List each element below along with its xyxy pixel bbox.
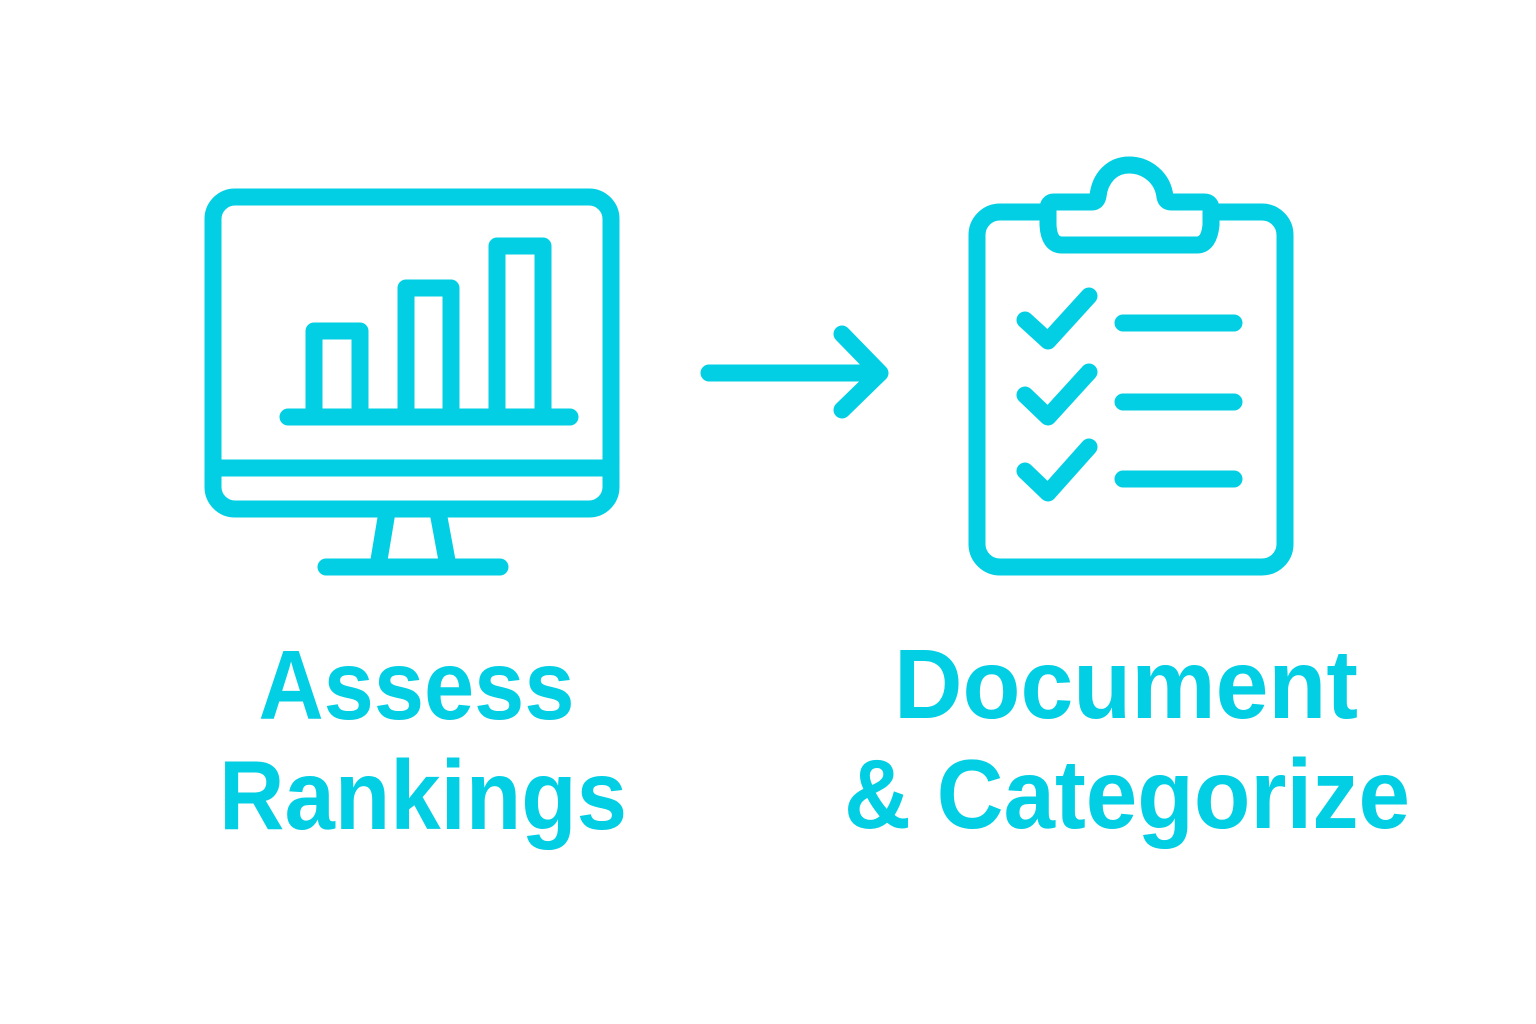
icon: computer monitor with bar chart	[213, 197, 611, 567]
bar chart	[288, 246, 570, 417]
label: Assess Rankings	[219, 630, 627, 850]
monitor stand	[326, 512, 500, 567]
label: Document & Categorize	[844, 629, 1410, 849]
checklist row 3	[1025, 447, 1234, 493]
monitor chin divider	[213, 460, 611, 476]
label: Assess Rankings: Assess	[258, 630, 574, 740]
icon: clipboard checklist	[977, 165, 1285, 567]
checklist row 1	[1025, 296, 1234, 341]
checklist row 2	[1025, 372, 1234, 417]
monitor frame	[213, 197, 611, 509]
label: Document & Categorize: & Categorize	[844, 739, 1410, 849]
label: Document & Categorize: Document	[894, 629, 1358, 739]
label: Assess Rankings: Rankings	[219, 740, 627, 850]
arrow	[709, 334, 880, 410]
clipboard clip	[1048, 165, 1211, 245]
clipboard board	[977, 212, 1285, 567]
